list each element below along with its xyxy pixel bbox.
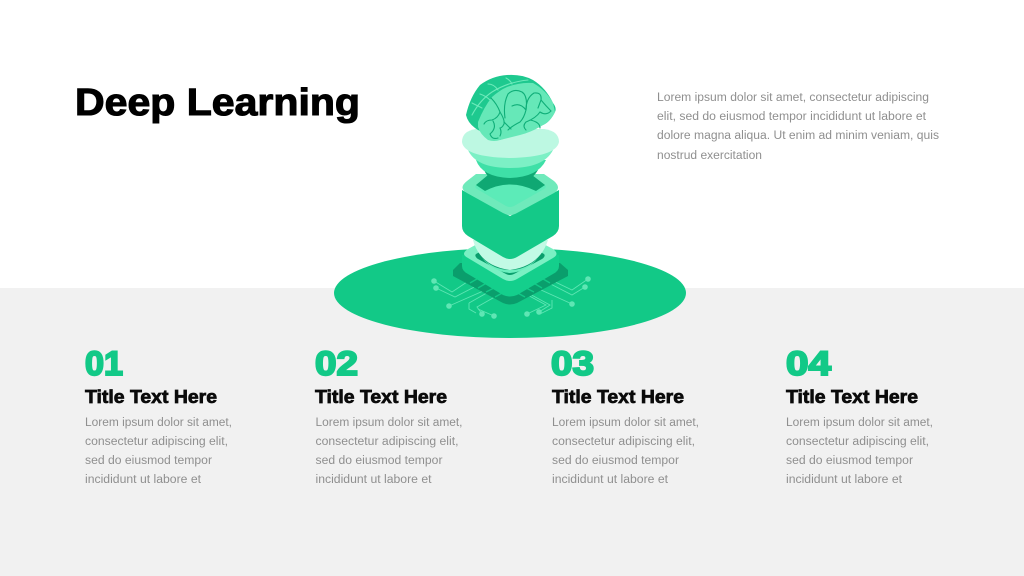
intro text block: nostrud exercitation — [657, 150, 762, 162]
tray recess — [475, 236, 545, 275]
heading 04: Title Text Here — [786, 387, 918, 407]
heading 02: Title Text Here — [315, 387, 447, 407]
cube top rim — [462, 174, 558, 215]
intro text block — [657, 92, 939, 162]
body 04: Lorem ipsum dolor sit amet, — [786, 417, 933, 429]
number 04: 04 — [786, 345, 831, 383]
title: Deep Learning — [75, 82, 360, 124]
number 01: 01 — [85, 345, 123, 383]
item 03 — [551, 345, 699, 486]
chip pins — [470, 276, 550, 297]
cube front — [462, 190, 559, 259]
body 03: incididunt ut labore et — [552, 474, 669, 486]
body 03: sed do eiusmod tempor — [552, 455, 679, 467]
intro text block: elit, sed do eiusmod tempor incididunt ut labore et — [657, 111, 927, 123]
lower funnel — [473, 240, 548, 270]
intro text block: Lorem ipsum dolor sit amet, consectetur adipiscing — [657, 92, 929, 104]
lower tray top — [464, 228, 556, 281]
circuit traces — [434, 277, 588, 316]
body 02: incididunt ut labore et — [316, 474, 432, 486]
item 04 — [786, 345, 933, 486]
body 04 — [786, 417, 933, 486]
body 02: sed do eiusmod tempor — [316, 455, 443, 467]
body 04: incididunt ut labore et — [786, 474, 903, 486]
brain base — [466, 75, 556, 140]
lower tray side — [462, 255, 559, 296]
item 02 — [315, 345, 462, 486]
lower background panel — [0, 288, 1024, 576]
number 03: 03 — [551, 345, 594, 383]
body 01: consectetur adipiscing elit, — [85, 436, 228, 448]
central illustration: brain on circuit platform — [334, 75, 686, 338]
body 03: Lorem ipsum dolor sit amet, — [552, 417, 699, 429]
body 04: sed do eiusmod tempor — [786, 455, 913, 467]
body 02: Lorem ipsum dolor sit amet, — [316, 417, 462, 429]
intro text block: dolore magna aliqua. Ut enim ad minim veniam, quis — [657, 130, 939, 142]
number 02: 02 — [315, 345, 358, 383]
green platform ellipse — [334, 248, 686, 338]
item 01 — [85, 345, 232, 486]
body 03 — [552, 417, 699, 486]
funnel bands — [476, 160, 546, 178]
body 01: Lorem ipsum dolor sit amet, — [85, 417, 232, 429]
circuit nodes — [431, 276, 591, 319]
brain crescent veins — [472, 78, 528, 115]
body 01: sed do eiusmod tempor — [85, 455, 212, 467]
brain folds — [484, 90, 551, 138]
body 03: consectetur adipiscing elit, — [552, 436, 695, 448]
brain — [466, 75, 556, 141]
heading 03: Title Text Here — [552, 387, 684, 407]
body 02: consectetur adipiscing elit, — [316, 436, 458, 448]
body 01: incididunt ut labore et — [85, 474, 202, 486]
body 02 — [316, 417, 462, 486]
cube recess shadow — [476, 175, 545, 191]
body 04: consectetur adipiscing elit, — [786, 436, 929, 448]
brain lobes — [478, 83, 555, 141]
heading 01: Title Text Here — [85, 387, 217, 407]
chip shadow — [453, 263, 568, 304]
body 01 — [85, 417, 232, 486]
cube recess floor — [475, 175, 546, 207]
bowl top — [462, 129, 559, 158]
funnel neck shadow — [484, 170, 538, 184]
